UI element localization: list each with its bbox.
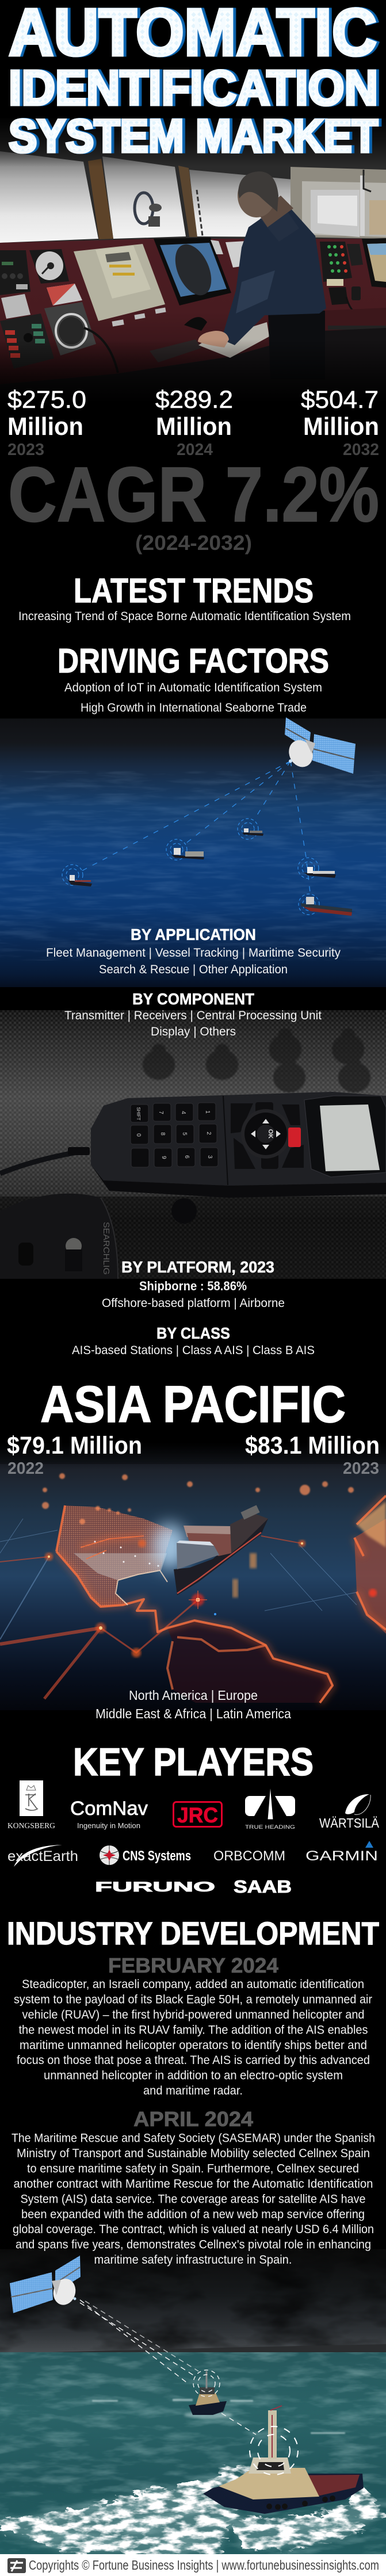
photo: world map with cargo ship (0, 1443, 386, 1710)
key labels: 8 (159, 1132, 166, 1136)
CAGR figure: (2024-2032) (135, 531, 252, 555)
section: latest trends (18, 572, 351, 623)
development: February 2024: and maritime radar. (143, 2084, 243, 2097)
development: April 2024: and spans five years, demonstrates Cellnex's pivotal role in enhancing (16, 2238, 371, 2252)
logo: Saab: SAAB (234, 1876, 292, 1897)
logo: ComNav: ComNav (70, 1798, 148, 1820)
development: April 2024: System (AIS) data service. The coverage areas for satellite AIS have (21, 2193, 366, 2206)
stat: 2023 value: $275.0 (7, 386, 86, 414)
black band below handset (0, 1279, 386, 1446)
development: February 2024: system to the payload of its Black Eagle 50H, a remotely unmanned air (14, 1993, 372, 2006)
logo: Wartsila (319, 1794, 380, 1830)
section: by class: AIS-based Stations | Class A AIS | Class B AIS (72, 1344, 315, 1357)
development: April 2024: maritime safety infrastructure in Spain. (94, 2253, 292, 2267)
logo: True Heading (245, 1785, 295, 1830)
development: February 2024: FEBRUARY 2024 (108, 1954, 278, 1977)
wake foam (0, 2462, 383, 2554)
cargo ship (174, 1505, 268, 1595)
section: by application (46, 926, 341, 976)
section: latest trends: Increasing Trend of Space Borne Automatic Identification System (18, 610, 351, 623)
ship tracking rings (62, 819, 319, 915)
section: asia pacific (7, 1376, 380, 1478)
section: by application: Fleet Management | Vessel Tracking | Maritime Security (46, 946, 341, 960)
logo: Kongsberg: KONGSBERG (7, 1822, 55, 1830)
stat: 2024 value: 2024 (177, 441, 213, 459)
near tug (203, 2406, 364, 2514)
signal dashes (80, 2300, 256, 2434)
development: February 2024: focus on those that pose a threat. The AIS is carried by this advanced (17, 2054, 370, 2067)
section: asia pacific: 2022 (7, 1459, 44, 1478)
section: latest trends: LATEST TRENDS (74, 572, 314, 610)
section: asia pacific: 2023 (343, 1459, 379, 1478)
stat: 2023 value: 2023 (7, 441, 44, 459)
key labels: 5 (181, 1132, 188, 1136)
section: by platform: Shipborne : 58.86% (139, 1279, 247, 1293)
continents (42, 1473, 386, 1703)
stat: 2032 value (301, 386, 379, 459)
section: by platform (102, 1258, 285, 1310)
key labels: SHIFT (136, 1107, 141, 1121)
logo: exactEarth: exactEarth (7, 1848, 78, 1864)
lower searchlight controls: SEARCHLIG (101, 1222, 111, 1275)
development: February 2024: vehicle (RUAV) – the first hybrid-powered unmanned helicopter and (22, 2008, 365, 2021)
development: April 2024 (12, 2107, 375, 2267)
logo: Garmin (305, 1841, 378, 1864)
lower searchlight controls (0, 1194, 197, 1279)
logo: ComNav: Ingenuity in Motion (77, 1821, 140, 1830)
photo: ships at sea tracked by satellite (0, 717, 386, 987)
section: driving factors: High Growth in International Seaborne Trade (81, 701, 307, 714)
glow behind ship (152, 1523, 187, 1569)
signal lines (81, 761, 311, 897)
officer (198, 171, 326, 380)
key labels: 0 (135, 1133, 142, 1137)
photo: AIS radio handset on carbon panel (0, 987, 386, 1279)
development: April 2024: Ministry of Transport and Sustainable Mobility selected Cellnex Spain (17, 2147, 370, 2160)
section: driving factors (58, 642, 329, 714)
logo: Kongsberg (7, 1780, 55, 1830)
section: by class: BY CLASS (156, 1324, 230, 1342)
glowing nodes (45, 1539, 377, 1657)
toggle switches (143, 1029, 370, 1092)
navigation pad (231, 1102, 304, 1169)
key labels (135, 1107, 213, 1159)
logo: Wartsila: WÄRTSILÄ (319, 1816, 380, 1830)
logo: Garmin: GARMIN (305, 1848, 378, 1864)
key labels: 7 (158, 1111, 164, 1114)
stat: 2024 value: Million (156, 412, 232, 441)
icon: Fortune Business Insights logo (7, 2558, 26, 2573)
ships (68, 828, 352, 916)
regions list (95, 1688, 291, 1721)
navigation pad: OK (267, 1129, 274, 1138)
photo: tugboats at sea with satellite (0, 2249, 386, 2554)
development: April 2024: to ensure maritime safety in Spain. Furthermore, Cellnex secured (27, 2162, 359, 2176)
section: driving factors: Adoption of IoT in Automatic Identification System (64, 681, 322, 694)
section: asia pacific: $79.1 Million (7, 1432, 142, 1459)
footer bar (0, 2554, 386, 2576)
section: asia pacific: ASIA PACIFIC (40, 1376, 346, 1434)
key labels: 6 (184, 1155, 190, 1159)
logo: ComNav (70, 1798, 148, 1830)
stat: 2023 value: Million (7, 412, 83, 441)
section: by application: BY APPLICATION (131, 926, 256, 943)
logo: CNS Systems (100, 1845, 191, 1865)
logo: Orbcomm: ORBCOMM (213, 1848, 285, 1864)
development: February 2024: maritime unmanned helicopter operators to identify ships better and (20, 2039, 367, 2052)
heading: key players: KEY PLAYERS (73, 1740, 314, 1784)
stat: 2023 value (7, 386, 86, 459)
logo: True Heading: TRUE HEADING (245, 1824, 295, 1830)
photo: ship bridge console with officer (0, 115, 386, 403)
title: IDENTIFICATION (9, 61, 378, 116)
regions list: North America | Europe (129, 1688, 258, 1703)
handset (91, 1092, 386, 1198)
console body (0, 238, 386, 384)
section: by component: Display | Others (151, 1025, 236, 1038)
development: February 2024: the newest model in its RUAV family. The addition of the AIS enables (18, 2024, 368, 2036)
key labels: 2 (205, 1132, 212, 1135)
key labels: 4 (180, 1111, 186, 1114)
section: by component: Transmitter | Receivers | Central Processing Unit (64, 1009, 322, 1022)
development: February 2024: unmanned helicopter in addition to an electro-optic system (44, 2069, 343, 2082)
keypad (131, 1103, 218, 1167)
logo: Furuno: FURUNO (95, 1879, 215, 1895)
development: April 2024: been expanded with the addition of a new web map service offering (21, 2208, 365, 2221)
satellite (285, 717, 356, 774)
section: by application: Search & Rescue | Other Application (99, 963, 288, 976)
logo: JRC: JRC (177, 1803, 218, 1827)
stat: 2032 value: 2032 (343, 441, 379, 459)
key labels: 3 (207, 1155, 213, 1159)
development: April 2024: APRIL 2024 (133, 2107, 253, 2131)
section: driving factors: DRIVING FACTORS (58, 642, 329, 680)
title (9, 0, 378, 162)
route lines (0, 1536, 302, 1699)
stat: 2032 value: Million (303, 412, 379, 441)
display screen (304, 1096, 386, 1177)
section: by platform: Offshore-based platform | Airborne (102, 1297, 285, 1310)
section: by class (72, 1324, 315, 1357)
stat: 2032 value: $504.7 (301, 386, 379, 414)
development: February 2024: Steadicopter, an Israeli company, added an automatic identification (22, 1978, 364, 1991)
logo: CNS Systems: CNS Systems (123, 1848, 191, 1864)
regions list: Middle East & Africa | Latin America (95, 1706, 291, 1721)
stat: 2024 value (155, 386, 233, 459)
satellite (10, 2256, 81, 2313)
development: April 2024: global coverage. The contract, which is valued at nearly USD 6.4 Million (13, 2223, 374, 2236)
development: April 2024: another contract with Maritime Rescue for the Automatic Identification (14, 2177, 373, 2191)
key labels: 9 (160, 1156, 167, 1159)
distant tug (184, 2370, 232, 2418)
key labels: 1 (204, 1110, 211, 1114)
development: February 2024 (14, 1954, 372, 2097)
section: by component (64, 990, 322, 1038)
section: by component: BY COMPONENT (132, 990, 254, 1008)
stat: 2024 value: $289.2 (155, 386, 233, 414)
section: by platform: BY PLATFORM, 2023 (121, 1258, 274, 1276)
